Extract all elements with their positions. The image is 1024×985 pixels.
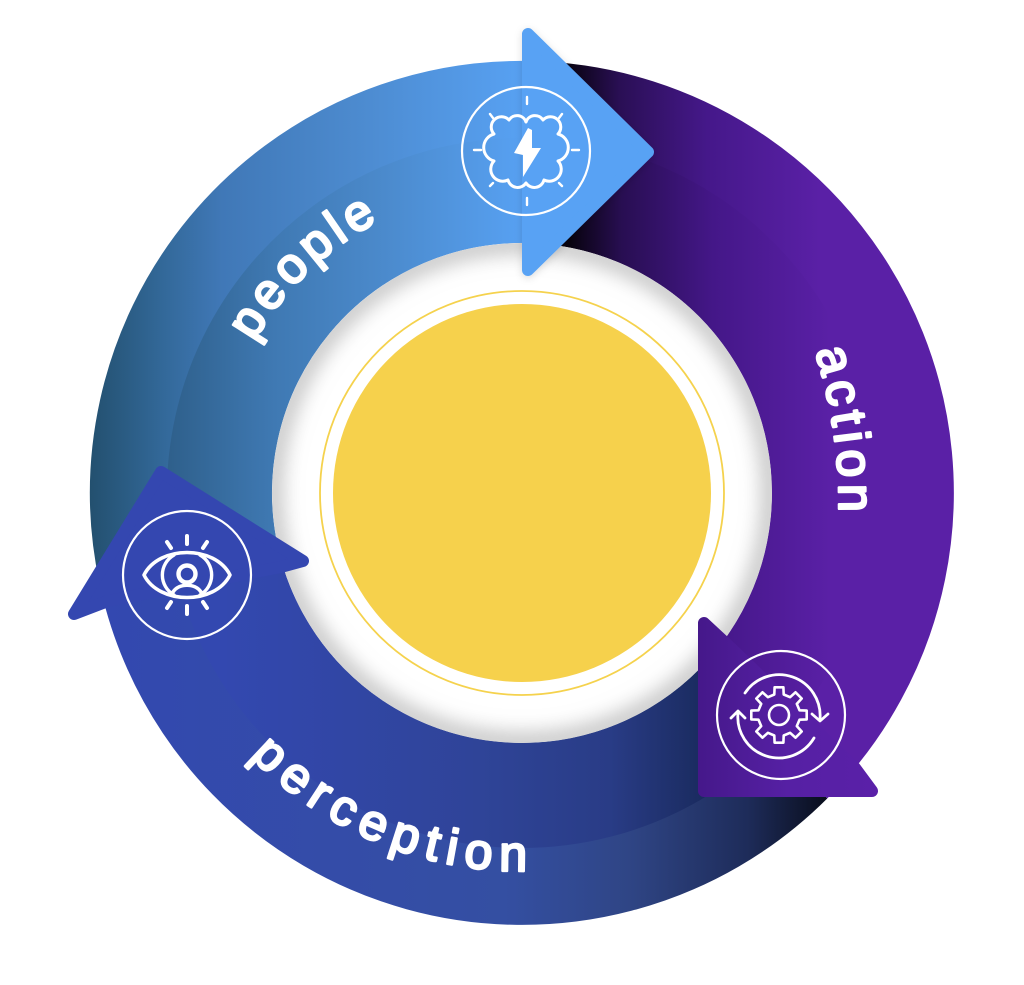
arrowhead: people xyxy=(528,34,648,270)
arrowhead: action xyxy=(704,623,872,791)
yellow outline ring xyxy=(320,291,724,695)
arrowhead: perception xyxy=(74,472,303,614)
label: people: people xyxy=(232,202,374,346)
band: action xyxy=(530,152,863,734)
cycle diagram xyxy=(68,28,954,925)
band: people xyxy=(181,152,530,564)
center white disc with inner shadow xyxy=(272,243,772,743)
label: perception: perception xyxy=(244,738,526,872)
label: action: action xyxy=(816,347,872,510)
icon: gear with rotating arrows xyxy=(717,651,845,779)
yellow center circle xyxy=(333,304,711,682)
band: perception xyxy=(191,566,763,834)
icon: eye with person xyxy=(123,511,251,639)
icon: brain with lightning bolt xyxy=(462,87,590,215)
